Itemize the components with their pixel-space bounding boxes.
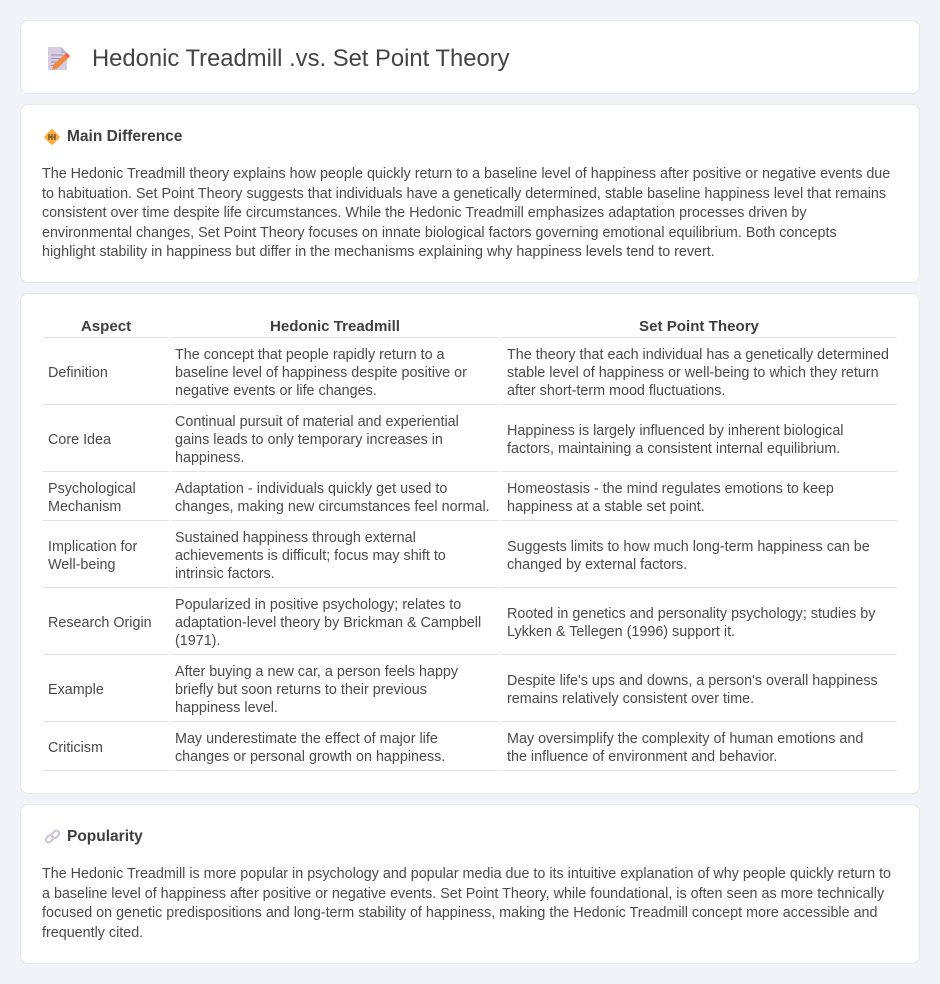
cell: The theory that each individual has a genetically determined	[507, 347, 889, 363]
row: implication for well-being	[48, 539, 138, 573]
icon: memo with pencil	[48, 47, 70, 70]
cell: (1971).	[175, 633, 220, 649]
cell	[175, 481, 490, 515]
table header: aspect: Aspect	[81, 318, 131, 335]
text block: popularity paragraph: The Hedonic Treadmill is more popular in psychology and popular media due to its intuitive explanation of why people quickly return to	[42, 866, 891, 882]
text block: popularity paragraph: a baseline level of happiness after positive or negative events. Set Point Theory, while foundational, is often seen as more technically	[42, 886, 884, 902]
cell: happiness at a stable set point.	[507, 499, 705, 515]
cell	[507, 731, 863, 765]
text block: main difference paragraph: highlight stability in happiness but differ in the mechanisms explaining why happiness levels tend to revert.	[42, 244, 715, 260]
panel: main difference	[20, 104, 920, 283]
cell: the influence of environment and behavior.	[507, 749, 777, 765]
cell	[507, 423, 843, 457]
cell	[507, 673, 878, 707]
panel: comparison table	[20, 293, 920, 794]
cell: intrinsic factors.	[175, 566, 275, 582]
cell	[507, 539, 870, 573]
cell: Adaptation - individuals quickly get used to	[175, 481, 447, 497]
row: example: Example	[48, 682, 104, 698]
cell: negative events or life changes.	[175, 383, 377, 399]
cell: Sustained happiness through external	[175, 530, 416, 546]
cell: changes or personal growth on happiness.	[175, 749, 445, 765]
title: Hedonic Treadmill .vs. Set Point Theory	[92, 45, 510, 72]
cell	[175, 664, 458, 716]
cell	[175, 530, 446, 582]
cell: Happiness is largely influenced by inherent biological	[507, 423, 843, 439]
cell	[507, 347, 889, 399]
cell: May oversimplify the complexity of human emotions and	[507, 731, 863, 747]
icon: orange diamond sign	[44, 129, 60, 145]
row: criticism: Criticism	[48, 740, 103, 756]
row: core idea: Core Idea	[48, 432, 111, 448]
cell: achievements is difficult; focus may shift to	[175, 548, 446, 564]
text block: main difference paragraph: to habituation. Set Point Theory suggests that individuals have a genetically determined, stable baseline happiness level that remains	[42, 186, 886, 202]
panel: title card	[20, 20, 920, 94]
icon: link	[44, 830, 60, 844]
cell: after short-term mood fluctuations.	[507, 383, 725, 399]
row: definition: Definition	[48, 365, 108, 381]
cell	[507, 481, 834, 515]
cell: Continual pursuit of material and experiential	[175, 414, 459, 430]
cell: remains relatively consistent over time.	[507, 691, 754, 707]
cell: Lykken & Tellegen (1996) support it.	[507, 624, 735, 640]
text block: popularity paragraph: frequently cited.	[42, 925, 143, 941]
cell	[175, 414, 459, 466]
cell: happiness.	[175, 450, 244, 466]
cell: happiness level.	[175, 700, 278, 716]
cell: Suggests limits to how much long-term happiness can be	[507, 539, 870, 555]
cell: The concept that people rapidly return to a	[175, 347, 445, 363]
row: implication for well-being: Well-being	[48, 557, 116, 573]
cell: Rooted in genetics and personality psychology; studies by	[507, 606, 875, 622]
cell: Homeostasis - the mind regulates emotions to keep	[507, 481, 834, 497]
cell: Popularized in positive psychology; relates to	[175, 597, 461, 613]
cell: baseline level of happiness despite positive or	[175, 365, 467, 381]
cell: Despite life's ups and downs, a person's overall happiness	[507, 673, 878, 689]
table header: hedonic treadmill: Hedonic Treadmill	[270, 318, 400, 335]
cell: changed by external factors.	[507, 557, 687, 573]
cell: briefly but soon returns to their previous	[175, 682, 427, 698]
cell: After buying a new car, a person feels happy	[175, 664, 458, 680]
cell: factors, maintaining a consistent internal equilibrium.	[507, 441, 840, 457]
text block: main difference paragraph: The Hedonic Treadmill theory explains how people quickly return to a baseline level of happiness after positive or negative events due	[42, 166, 890, 182]
cell: changes, making new circumstances feel normal.	[175, 499, 490, 515]
cell: May underestimate the effect of major life	[175, 731, 438, 747]
text block: popularity paragraph: focused on genetic predispositions and long-term stability of happiness, making the Hedonic Treadmill concept more accessible and	[42, 905, 877, 921]
cell	[175, 731, 445, 765]
table header: set point theory: Set Point Theory	[639, 318, 759, 335]
cell: adaptation-level theory by Brickman & Campbell	[175, 615, 481, 631]
text block: main difference paragraph	[42, 166, 890, 260]
row: research origin: Research Origin	[48, 615, 152, 631]
row: psychological mechanism: Psychological	[48, 481, 136, 497]
row: implication for well-being: Implication for	[48, 539, 137, 555]
cell	[507, 606, 876, 640]
row: psychological mechanism	[48, 481, 136, 515]
text block: main difference paragraph: consistent over time despite life circumstances. While the Hedonic Treadmill emphasizes adaptation processes driven by	[42, 205, 807, 221]
cell: gains leads to only temporary increases in	[175, 432, 443, 448]
heading: main difference: Main Difference	[67, 128, 182, 145]
heading: popularity: Popularity	[67, 828, 143, 845]
text block: popularity paragraph	[42, 866, 891, 941]
cell	[175, 597, 481, 649]
text block: main difference paragraph: environmental changes, Set Point Theory focuses on innate biological factors governing emotional equilibrium. Both concepts	[42, 225, 837, 241]
cell	[175, 347, 467, 399]
cell: stable level of happiness or well-being to which they return	[507, 365, 879, 381]
row: psychological mechanism: Mechanism	[48, 499, 121, 515]
panel: popularity	[20, 804, 920, 964]
